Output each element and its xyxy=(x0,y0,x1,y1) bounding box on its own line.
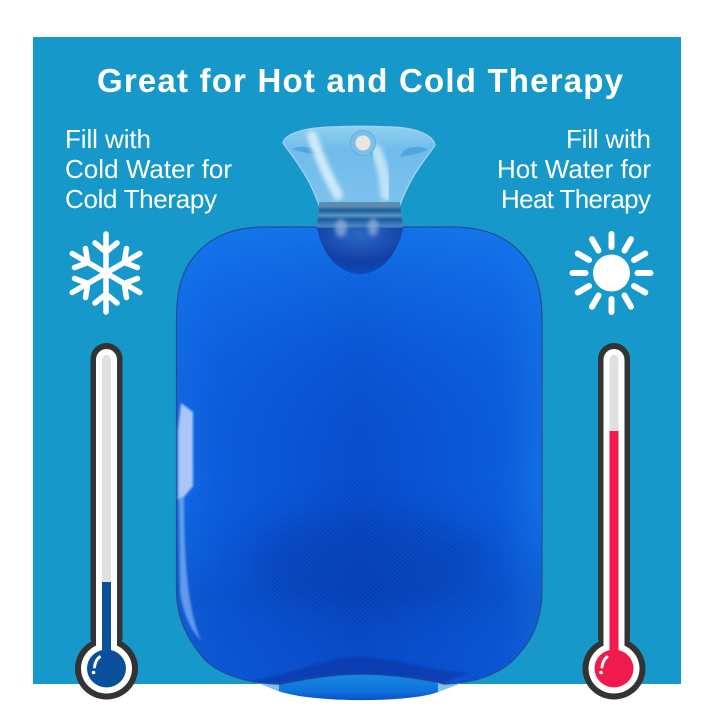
text block: heat therapy: Fill with xyxy=(566,124,651,154)
thermometer: hot xyxy=(582,343,646,700)
bottle: bottom lip xyxy=(258,670,462,700)
bottle: funnel neck xyxy=(283,126,435,230)
thermometer: cold xyxy=(75,343,138,700)
text block: cold therapy: Cold Therapy xyxy=(65,184,217,214)
text block: heat therapy: Hot Water for xyxy=(497,154,651,184)
text block: heat therapy xyxy=(497,124,651,214)
hot water bottle xyxy=(176,126,542,700)
text block: cold therapy: Cold Water for xyxy=(65,154,232,184)
title: Great for Hot and Cold Therapy xyxy=(97,62,624,99)
text block: heat therapy: Heat Therapy xyxy=(501,184,651,214)
bottle: stopper bulb xyxy=(317,228,403,274)
text block: cold therapy xyxy=(65,124,232,214)
icon: sun xyxy=(572,234,650,312)
icon: snowflake xyxy=(67,234,145,312)
text block: cold therapy: Fill with xyxy=(65,124,151,154)
bottle: main body xyxy=(176,227,542,684)
